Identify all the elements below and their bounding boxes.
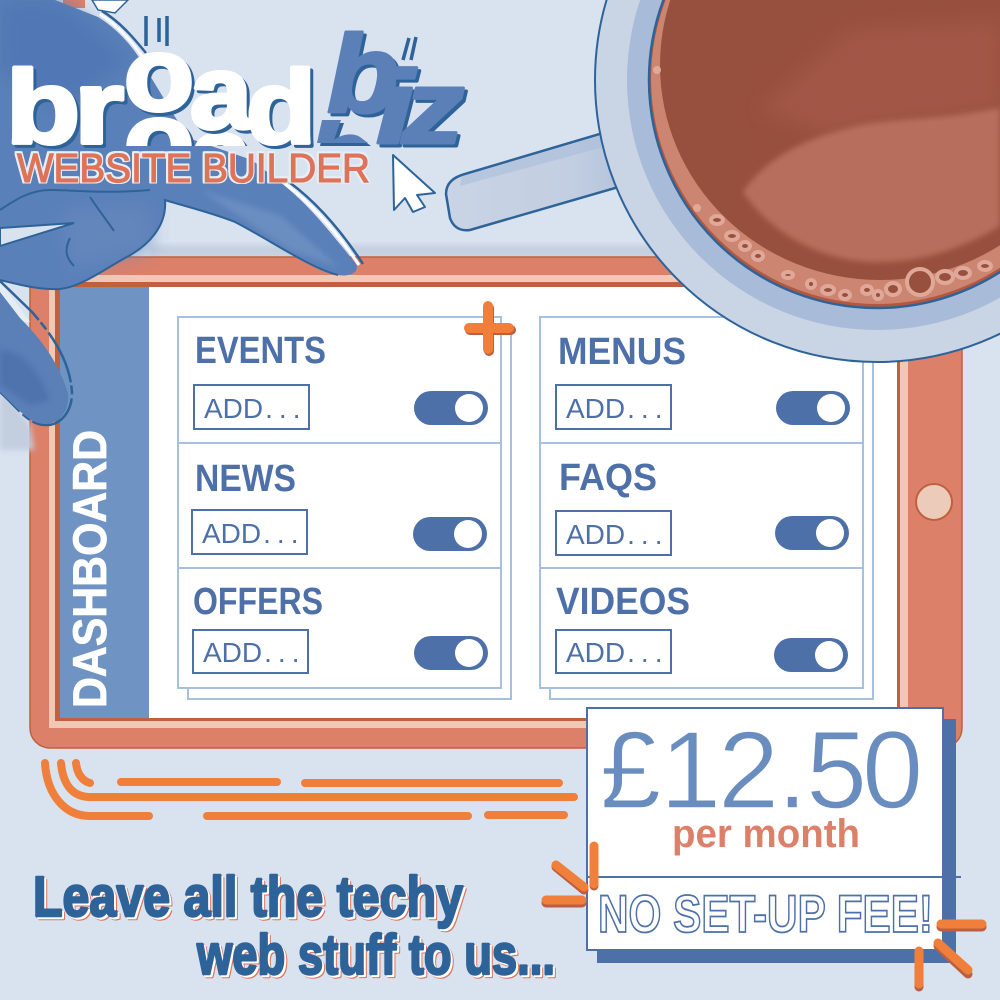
panel: price box bbox=[587, 708, 961, 963]
card: faqs bbox=[556, 457, 849, 555]
card: news: NEWS bbox=[195, 458, 296, 500]
card: news: ADD... bbox=[202, 518, 298, 549]
logo: broadbiz: d bbox=[246, 50, 316, 166]
tablet shadow band bbox=[150, 245, 710, 258]
card: videos: VIDEOS bbox=[556, 581, 690, 623]
logo word: broad: o bbox=[124, 82, 194, 198]
icon: burst right bbox=[919, 924, 982, 987]
logo: broadbiz: r bbox=[74, 50, 124, 166]
card: faqs: FAQS bbox=[559, 457, 657, 499]
logo word: biz bbox=[317, 120, 368, 143]
icon: hand bbox=[0, 0, 363, 450]
card: faqs: ADD... bbox=[566, 519, 662, 550]
card: offers: OFFERS bbox=[193, 581, 323, 623]
icon: mouse cursor bbox=[393, 155, 435, 212]
card: videos bbox=[556, 581, 848, 673]
card: offers bbox=[193, 581, 488, 673]
upper hand outline bbox=[102, 11, 363, 264]
card: menus: MENUS bbox=[558, 331, 686, 373]
panel: left content cards bbox=[178, 317, 511, 699]
card: events: ADD... bbox=[204, 393, 300, 424]
icon: coffee mug from above bbox=[595, 0, 1000, 362]
panel: dashboard sidebar bbox=[60, 287, 149, 718]
icon: burst left bbox=[546, 846, 594, 903]
tagline: web stuff to us... bbox=[196, 923, 555, 987]
coffee surface bbox=[660, 0, 1000, 280]
tagline bbox=[33, 865, 555, 987]
hand shading bbox=[0, 0, 130, 110]
card: videos: ADD... bbox=[566, 637, 662, 668]
logo: broadbiz: b bbox=[6, 50, 80, 166]
logo: broadbiz: a bbox=[190, 35, 253, 151]
dashboard label: DASHBOARD bbox=[63, 430, 116, 708]
card: offers: ADD... bbox=[203, 637, 299, 668]
logo: broadbiz: z bbox=[401, 50, 464, 166]
logo: broadbiz: o bbox=[124, 17, 194, 133]
logo: broadbiz: b bbox=[327, 13, 399, 136]
card: news bbox=[192, 458, 487, 554]
logo: broadbiz: i bbox=[376, 50, 417, 166]
card: menus: ADD... bbox=[566, 393, 662, 424]
logo subtitle: WEBSITE BUILDER bbox=[17, 145, 370, 191]
motion lines under tablet bbox=[45, 763, 574, 816]
foam ring bbox=[651, 0, 1000, 304]
logo: broadbiz bbox=[12, 16, 468, 184]
coffee highlight bbox=[743, 108, 1000, 262]
icon: coffee mug handle bbox=[446, 122, 660, 230]
per month: per month bbox=[672, 812, 860, 856]
panel: right content cards bbox=[540, 317, 873, 699]
card: events bbox=[194, 330, 488, 429]
motion lines bbox=[146, 16, 167, 46]
sleeve cuff bbox=[92, 0, 128, 13]
card: menus bbox=[556, 331, 850, 429]
icon: plus bbox=[469, 306, 511, 351]
finger outlines bbox=[0, 190, 338, 289]
logo: broadbiz: a bbox=[190, 97, 253, 213]
card: events: EVENTS bbox=[195, 330, 326, 372]
upper hand fill bbox=[0, 0, 357, 289]
gap between fingers bbox=[0, 223, 74, 246]
price: £12.50 bbox=[600, 709, 923, 832]
tagline: Leave all the techy bbox=[33, 865, 463, 929]
lower finger bbox=[0, 281, 72, 425]
foam bubbles bbox=[655, 68, 991, 299]
panel: tablet bbox=[30, 257, 962, 748]
icon: tablet home button bbox=[916, 484, 952, 520]
